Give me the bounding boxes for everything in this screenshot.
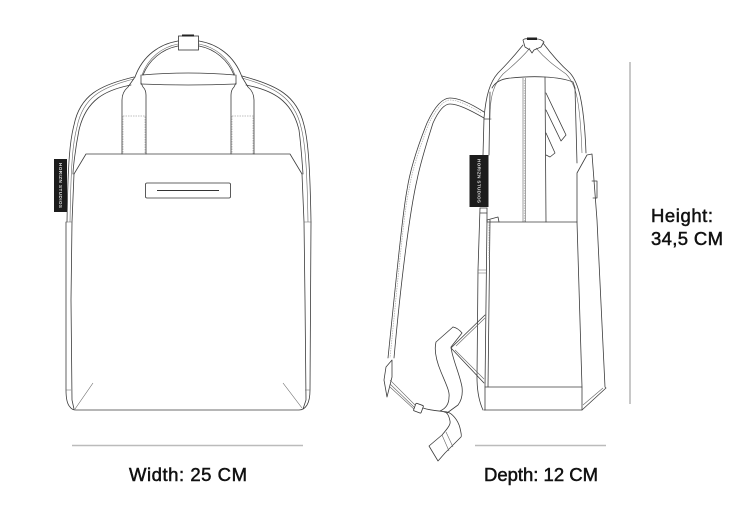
front view: handle buckle <box>178 34 198 50</box>
front view: side panels and base <box>66 222 311 410</box>
width label: Width: 25 CM <box>129 464 247 485</box>
side view: brand tag: HORIZN STUDIOS <box>476 159 481 203</box>
front view of backpack <box>54 34 311 410</box>
side view: front pocket and base <box>484 154 606 410</box>
width measure line <box>72 444 303 446</box>
side view of backpack <box>384 38 606 461</box>
side view: zip column <box>523 77 546 222</box>
side view: strap triangle anchor <box>451 315 485 383</box>
height label <box>651 205 723 249</box>
front view: brand tag <box>54 159 67 212</box>
front view: zip pull <box>146 183 230 198</box>
side view: lower strap and buckle <box>384 327 462 461</box>
front view: handle straps <box>122 77 254 154</box>
height label: 34,5 CM <box>651 228 723 249</box>
front view: front pocket <box>71 154 306 409</box>
height measure line <box>629 62 631 404</box>
front view: brand tag: HORIZN STUDIOS <box>58 163 63 208</box>
side view: top and upper body <box>483 38 586 163</box>
side view: shoulder strap <box>388 98 484 358</box>
height label: Height: <box>651 205 713 226</box>
side view: back panel <box>477 208 487 410</box>
front view: main body outline <box>67 76 311 222</box>
depth label: Depth: 12 CM <box>484 464 598 485</box>
depth measure line <box>475 444 606 446</box>
side view: brand tag <box>470 155 488 207</box>
front view: carry handle <box>135 41 242 85</box>
side view: zip pulls <box>546 93 566 157</box>
